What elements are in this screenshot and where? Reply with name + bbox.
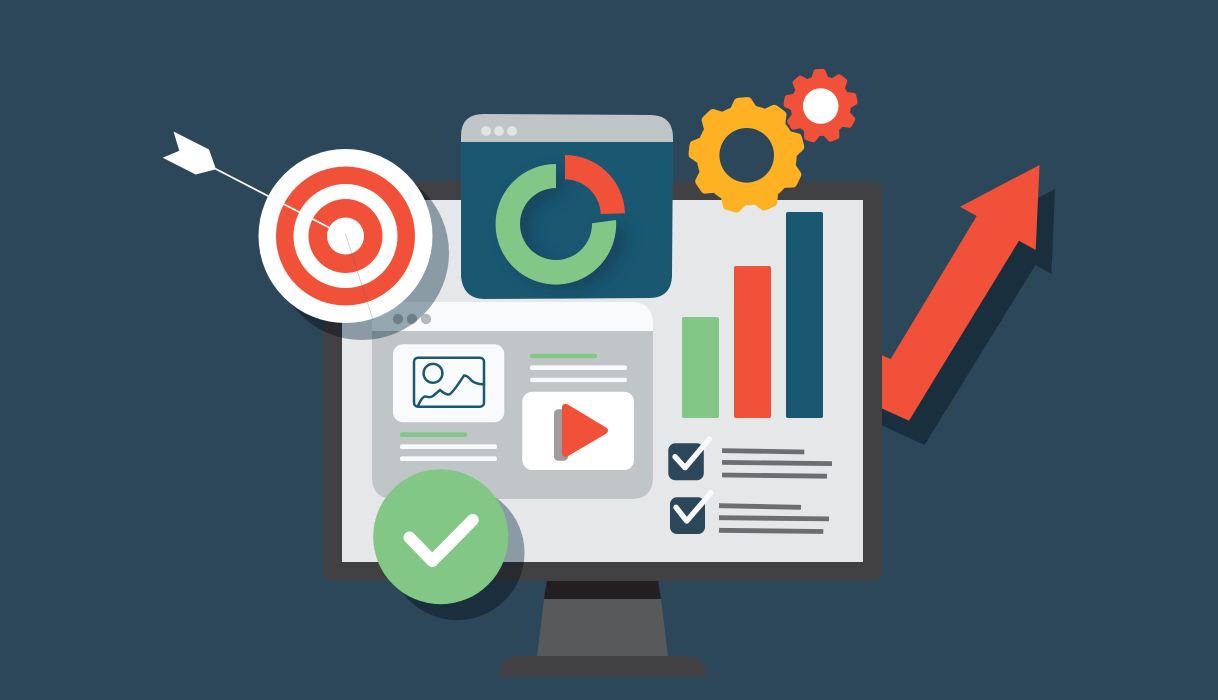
target with arrow xyxy=(163,132,449,340)
arrow shadow xyxy=(870,189,1055,445)
target shadow xyxy=(292,184,449,340)
monitor stand xyxy=(537,599,668,657)
dashboard body xyxy=(461,142,673,299)
donut chart xyxy=(496,155,625,285)
checklist lines two xyxy=(719,506,829,532)
monitor xyxy=(323,181,882,677)
donut red segment xyxy=(565,155,625,214)
target rings xyxy=(258,149,432,323)
icon: picture xyxy=(414,358,484,407)
target seam xyxy=(346,234,373,320)
arrow head xyxy=(163,132,216,174)
image card xyxy=(393,344,504,422)
checklist lines one xyxy=(722,451,832,476)
text lines left xyxy=(400,432,497,461)
monitor screen xyxy=(342,200,863,562)
badge check mark xyxy=(410,520,473,561)
checklist xyxy=(668,439,832,534)
monitor stand neck xyxy=(544,580,661,599)
window body xyxy=(372,331,653,499)
monitor frame xyxy=(323,181,882,581)
donut green segment xyxy=(496,164,616,285)
approval badge xyxy=(373,469,524,620)
dashboard dots xyxy=(481,126,517,136)
content window xyxy=(372,302,653,499)
monitor base xyxy=(498,656,707,677)
red bar xyxy=(734,266,771,418)
green bar xyxy=(682,317,719,418)
checkbox one xyxy=(668,439,709,480)
icon: red gear xyxy=(783,69,859,144)
window header xyxy=(372,302,653,331)
blue bar xyxy=(786,212,823,418)
checkbox two xyxy=(670,493,711,534)
bar chart xyxy=(682,212,823,418)
icon: yellow gear xyxy=(688,96,806,215)
window dots xyxy=(393,314,431,324)
badge shadow xyxy=(402,497,524,620)
dashboard window xyxy=(461,114,673,299)
dashboard header xyxy=(461,114,673,142)
arrow shaft xyxy=(212,167,329,228)
donut shadow xyxy=(506,170,626,290)
video card xyxy=(522,392,634,470)
icon: play button xyxy=(554,407,604,461)
badge circle xyxy=(373,469,508,604)
illustration xyxy=(162,68,1055,677)
growth arrow xyxy=(870,165,1055,445)
arrow body xyxy=(870,165,1040,421)
text lines right xyxy=(530,354,627,382)
